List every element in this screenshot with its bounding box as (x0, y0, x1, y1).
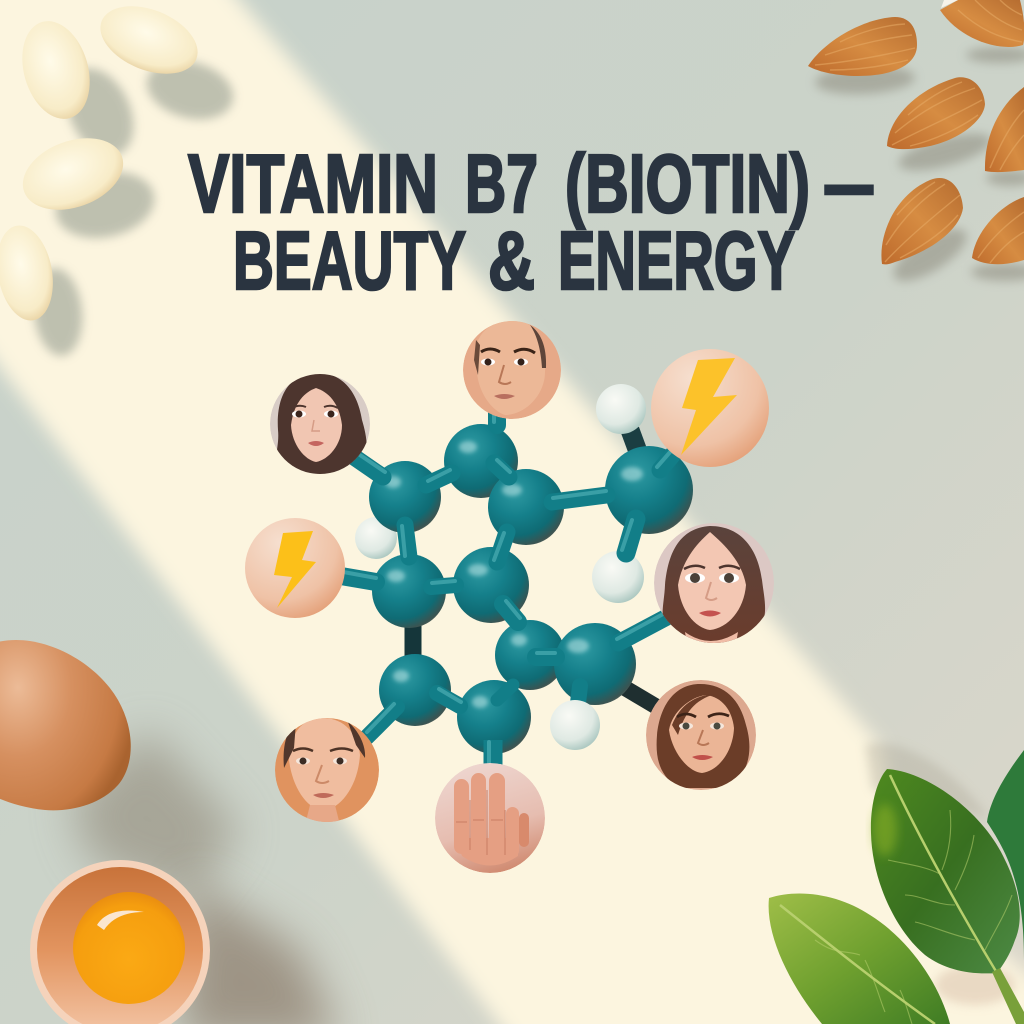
panel: bowl with yolk (30, 860, 340, 1024)
atoms: carbon (369, 424, 693, 754)
panel: peanuts (0, 0, 240, 358)
icon: lightning bolt left (245, 518, 345, 618)
atom: hydrogen front (550, 700, 600, 750)
panel: almonds (808, 0, 1024, 291)
panel: leaves (769, 743, 1024, 1024)
back bonds (413, 430, 662, 710)
title (188, 137, 873, 307)
icon: face lower right (646, 680, 756, 790)
icon: face top left (270, 372, 370, 476)
icon: face right (654, 523, 774, 650)
icon: face top center (463, 320, 561, 419)
icon: lightning bolt right (651, 349, 769, 467)
front bonds (335, 410, 675, 770)
title: ENERGY (558, 214, 795, 307)
title: & (488, 214, 535, 307)
molecule diagram (335, 384, 693, 770)
title: BEAUTY (233, 214, 466, 307)
title: — (825, 137, 873, 230)
panel: egg (0, 640, 240, 900)
atom highlights (385, 441, 643, 708)
title: B7 (465, 137, 538, 230)
icon: face lower left (275, 718, 379, 825)
atoms: hydrogen (355, 384, 646, 603)
title: (BIOTIN) (565, 137, 810, 230)
icon: hand (435, 763, 545, 873)
title: VITAMIN (188, 137, 438, 230)
bond highlights (338, 410, 671, 763)
